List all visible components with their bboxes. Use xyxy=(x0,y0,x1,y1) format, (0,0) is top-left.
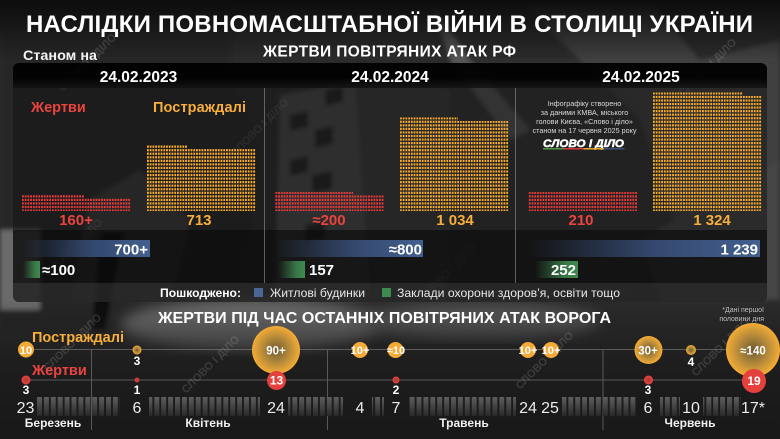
day labels: 6 xyxy=(644,400,653,417)
bar: residential buildings 2024: ≈800 xyxy=(389,242,422,258)
column dividers xyxy=(264,88,516,283)
source note: станом на 17 червня 2025 року xyxy=(533,126,637,135)
numbers: victims and injured: ≈200 xyxy=(312,212,346,229)
numbers: victims and injured: 210 xyxy=(568,212,594,229)
numbers: victims and injured: 713 xyxy=(186,212,212,229)
label: injured: Постраждалі xyxy=(153,100,246,116)
date header band xyxy=(13,63,767,88)
watermarks: Слово і діло: СЛОВО І ДІЛО xyxy=(229,96,291,159)
note: first half of day data: половини дня xyxy=(719,316,764,323)
bar: health and education 2025 xyxy=(535,261,578,279)
bubbles: injured: 3 xyxy=(134,354,141,368)
bubbles: victims: 2 xyxy=(393,383,400,397)
dot chart: injured 2025 xyxy=(653,92,762,211)
watermarks: Слово і діло: СЛОВО І ДІЛО xyxy=(180,333,242,396)
bar: health and education 2024 xyxy=(278,261,334,279)
heading: victims of latest attacks: ЖЕРТВИ ПІД ЧАС ОСТАННІХ ПОВІТРЯНИХ АТАК ВОРОГА xyxy=(157,310,611,327)
bar: health and education 2024: 157 xyxy=(309,262,334,279)
damage stats band xyxy=(13,230,767,283)
day labels: 17* xyxy=(741,400,765,417)
bubbles: victims: 13 xyxy=(270,374,283,388)
date header band: 24.02.2025 xyxy=(602,69,680,86)
day labels: 23 xyxy=(17,400,34,417)
dot chart: injured 2024 xyxy=(400,118,509,211)
watermarks: Слово і діло xyxy=(42,31,752,396)
dot chart: victims 2023 xyxy=(22,195,131,211)
numbers: victims and injured xyxy=(59,212,731,229)
watermarks: Слово і діло: СЛОВО І ДІЛО xyxy=(690,316,752,379)
bubbles: victims: 3 xyxy=(23,383,30,397)
legend: Житлові будинки xyxy=(270,286,365,300)
month labels: Червень xyxy=(665,416,715,430)
note: first half of day data: *Дані першої xyxy=(722,306,764,314)
day labels: 6 xyxy=(133,400,142,417)
date header band: 24.02.2024 xyxy=(351,69,429,86)
day labels: 4 xyxy=(356,400,365,417)
numbers: victims and injured: 160+ xyxy=(59,212,93,229)
label: injured series: Постраждалі xyxy=(32,330,124,346)
label: as of: Станом на xyxy=(23,48,98,63)
month labels: Квітень xyxy=(185,416,231,430)
day labels: 7 xyxy=(392,400,401,417)
bubbles: victims: 19 xyxy=(747,374,761,388)
bar: health and education 2023: ≈100 xyxy=(42,262,75,279)
label: victims series: Жертви xyxy=(31,363,87,379)
subtitle: air attack victims: ЖЕРТВИ ПОВІТРЯНИХ АТАК РФ xyxy=(262,44,516,60)
bubbles: injured: 10+ xyxy=(519,345,537,357)
legend: Пошкоджено: xyxy=(160,286,241,300)
bar: residential buildings 2025: 1 239 xyxy=(720,242,758,258)
day labels xyxy=(17,400,765,417)
bubbles: injured: 10+ xyxy=(351,345,369,357)
watermarks: Слово і діло: СЛОВО І ДІЛО xyxy=(417,241,479,304)
watermarks: Слово і діло: СЛОВО І ДІЛО xyxy=(43,216,105,279)
bubbles: injured: ≈10 xyxy=(387,345,405,357)
date header band: 24.02.2023 xyxy=(100,69,178,86)
legend band background xyxy=(13,283,767,302)
title: НАСЛІДКИ ПОВНОМАСШТАБНОЇ ВІЙНИ В СТОЛИЦІ УКРАЇНИ xyxy=(26,10,753,38)
bubbles: injured: 10+ xyxy=(542,345,560,357)
bubbles: victims: 1 xyxy=(134,383,141,397)
month labels xyxy=(25,416,715,430)
day labels: 24 xyxy=(519,400,537,417)
dot chart: injured 2023 xyxy=(147,146,256,211)
numbers: victims and injured: 1 034 xyxy=(436,212,474,229)
bubbles: injured: ≈140 xyxy=(740,346,766,358)
bar: residential buildings 2024 xyxy=(275,240,423,258)
calendar tick strip xyxy=(37,397,741,416)
watermarks: Слово і діло: СЛОВО І ДІЛО xyxy=(677,36,739,99)
legend: Заклади охорони здоров’я, освіти тощо xyxy=(397,286,620,300)
bar: health and education 2025: 252 xyxy=(551,262,576,279)
timeline chart xyxy=(17,323,780,430)
bar: residential buildings 2023 xyxy=(22,240,150,258)
panel: yearly statistics xyxy=(13,63,767,302)
watermarks: Слово і діло: СЛОВО І ДІЛО xyxy=(514,329,576,392)
source note xyxy=(533,99,637,135)
dot chart: victims 2025 xyxy=(528,192,637,211)
panel background xyxy=(13,63,767,302)
day labels: 25 xyxy=(541,400,559,417)
bubbles: injured: 10 xyxy=(20,345,32,357)
bubbles: injured xyxy=(18,323,780,377)
source note: Інфографіку створено xyxy=(548,99,621,108)
note: first half of day data xyxy=(719,306,764,323)
bubbles: injured: 4 xyxy=(688,355,695,369)
watermarks: Слово і діло: СЛОВО І ДІЛО xyxy=(57,31,119,94)
month labels: Березень xyxy=(25,416,81,430)
label: victims: Жертви xyxy=(30,100,86,116)
bar: residential buildings 2025 xyxy=(528,240,760,258)
source note: за даними КМВА, міського xyxy=(541,108,628,117)
timeline grid lines xyxy=(26,350,780,430)
day labels: 10 xyxy=(682,400,700,417)
numbers: victims and injured: 1 324 xyxy=(693,212,731,229)
dot chart: victims 2024 xyxy=(275,192,384,211)
day labels: 24 xyxy=(267,400,285,417)
bar: health and education 2023 xyxy=(23,261,75,279)
bubbles: injured: 30+ xyxy=(638,346,658,358)
bar: residential buildings 2023: 700+ xyxy=(114,242,148,258)
logo: Слово і діло: СЛОВО І ДІЛО xyxy=(543,138,624,150)
legend xyxy=(160,286,620,300)
month labels: Травень xyxy=(439,416,489,430)
bubbles: injured: 90+ xyxy=(266,346,286,358)
source note: голови Києва, «Слово і діло» xyxy=(536,117,633,126)
bubbles: victims: 3 xyxy=(645,383,652,397)
bubbles: victims xyxy=(22,369,766,397)
watermarks: Слово і діло: СЛОВО І ДІЛО xyxy=(42,311,104,374)
